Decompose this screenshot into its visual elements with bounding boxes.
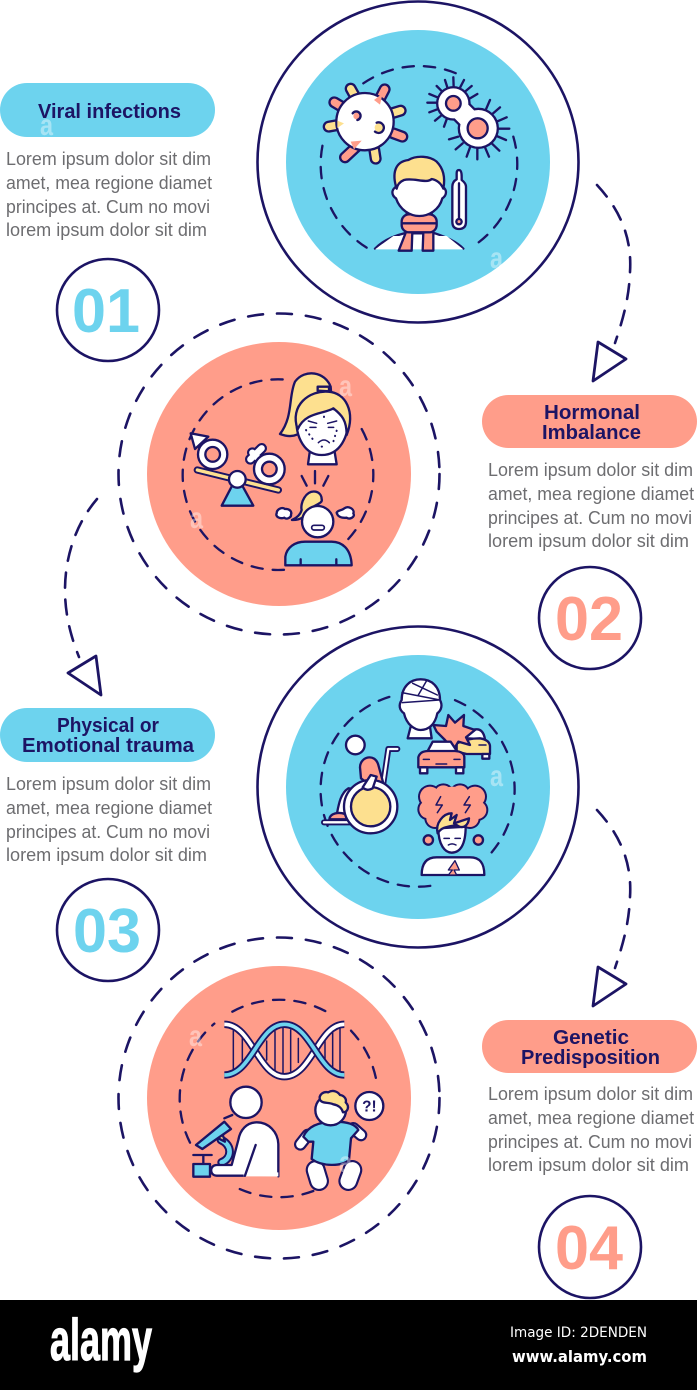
watermark glyphs: a xyxy=(189,1020,202,1053)
text block 2: lorem ipsum dolor sit dim xyxy=(488,531,689,551)
number badge 02 xyxy=(539,567,641,669)
dashed arrow 2 xyxy=(65,499,101,695)
text block 3: lorem ipsum dolor sit dim xyxy=(6,845,207,865)
panel: viral infections xyxy=(0,83,215,240)
virus xyxy=(329,89,402,159)
step 2 circle: hormonal imbalance xyxy=(118,314,440,634)
speech bubble xyxy=(355,1092,383,1120)
panel: physical or emotional trauma: Emotional trauma xyxy=(22,734,195,757)
text block 1: Lorem ipsum dolor sit dim xyxy=(6,149,211,169)
text block 3: principes at. Cum no movi xyxy=(6,822,210,842)
text block 1: amet, mea regione diamet xyxy=(6,173,212,193)
panel: hormonal imbalance: Hormonal xyxy=(544,401,640,424)
text block 4: amet, mea regione diamet xyxy=(488,1108,694,1128)
number badge 02: 02 xyxy=(555,585,623,654)
text block 3: amet, mea regione diamet xyxy=(6,798,212,818)
text block 1: lorem ipsum dolor sit dim xyxy=(6,220,207,240)
alamy logo: alamy xyxy=(50,1308,152,1373)
dashed arrow 3 xyxy=(593,810,630,1006)
gender balance scale xyxy=(191,433,285,506)
number badge 04 xyxy=(539,1196,641,1298)
speech bubble: ?! xyxy=(362,1099,377,1116)
text block 1: principes at. Cum no movi xyxy=(6,197,210,217)
panel: genetic predisposition: Predisposition xyxy=(521,1046,660,1069)
number badge 03: 03 xyxy=(73,897,141,966)
icon: DNA, scientist at microscope, baby xyxy=(180,1000,383,1197)
panel: hormonal imbalance xyxy=(482,395,697,551)
step 4 circle: genetic predisposition xyxy=(118,938,440,1258)
stressed person with storm cloud xyxy=(417,783,488,875)
text block 4: Lorem ipsum dolor sit dim xyxy=(488,1084,693,1104)
scientist xyxy=(211,1087,278,1176)
text block 2: amet, mea regione diamet xyxy=(488,484,694,504)
dashed arrow 1 xyxy=(593,185,630,381)
man with scarf xyxy=(375,157,463,251)
watermark glyphs: a xyxy=(339,1146,352,1179)
panel: physical or emotional trauma xyxy=(0,708,215,865)
number badge 03 xyxy=(57,879,159,981)
watermark glyphs: a xyxy=(190,502,203,535)
image id: Image ID: 2DENDEN xyxy=(510,1325,647,1341)
watermark glyphs xyxy=(40,109,503,1179)
number badge 01 xyxy=(57,259,159,361)
icon: virus, bacteria, sick man xyxy=(321,66,517,251)
text block 4: principes at. Cum no movi xyxy=(488,1132,692,1152)
bandaged head xyxy=(400,679,441,738)
text block 1 xyxy=(6,149,212,240)
panel: viral infections: Viral infections xyxy=(38,100,181,123)
bacteria xyxy=(427,77,509,159)
icon: injured head, car crash, wheelchair, stressed person xyxy=(321,679,515,887)
thermometer xyxy=(452,170,466,229)
microscope xyxy=(193,1115,232,1177)
angry person xyxy=(276,471,354,565)
panel: physical or emotional trauma: Physical or xyxy=(57,714,159,737)
icon: woman with acne, gender scale, angry person xyxy=(183,373,373,570)
website: www.alamy.com xyxy=(512,1347,647,1366)
watermark glyphs: a xyxy=(490,760,503,793)
panel: genetic predisposition xyxy=(482,1020,697,1175)
step 1 circle: viral infections xyxy=(258,2,578,322)
watermark glyphs: a xyxy=(339,370,352,403)
DNA helix xyxy=(224,1024,344,1077)
number badge 01: 01 xyxy=(72,277,140,346)
text block 3: Lorem ipsum dolor sit dim xyxy=(6,774,211,794)
watermark glyphs: a xyxy=(490,242,503,275)
panel: hormonal imbalance: Imbalance xyxy=(542,421,641,444)
person in wheelchair xyxy=(324,736,397,833)
baby xyxy=(300,1091,361,1181)
text block 2: Lorem ipsum dolor sit dim xyxy=(488,460,693,480)
car crash xyxy=(418,715,490,773)
text block 4 xyxy=(488,1084,694,1175)
woman with acne xyxy=(280,373,350,464)
number badge 04: 04 xyxy=(555,1214,624,1283)
text block 2 xyxy=(488,460,694,551)
step 3 circle: physical or emotional trauma xyxy=(258,626,578,948)
text block 3 xyxy=(6,774,212,865)
footer bar xyxy=(0,1300,697,1390)
text block 4: lorem ipsum dolor sit dim xyxy=(488,1155,689,1175)
watermark glyphs: a xyxy=(40,109,53,142)
text block 2: principes at. Cum no movi xyxy=(488,508,692,528)
panel: genetic predisposition: Genetic xyxy=(553,1026,629,1049)
